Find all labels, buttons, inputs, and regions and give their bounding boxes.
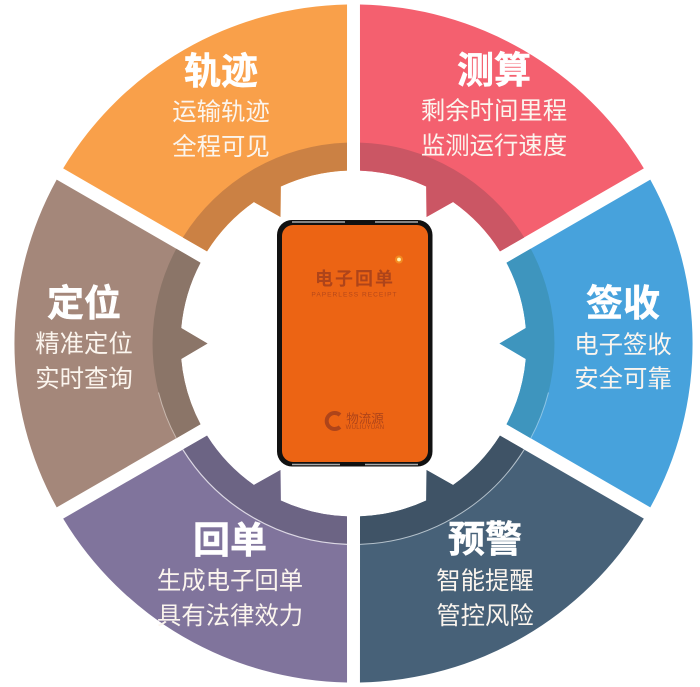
heading: 测算: 测算 <box>457 50 531 91</box>
text: 回单 description: 具有法律效力 <box>157 603 303 630</box>
heading: 轨迹: 轨迹 <box>184 51 258 92</box>
device subtitle: PAPERLESS RECEIPT <box>311 292 398 298</box>
logo: WULIUYUAN <box>346 425 384 431</box>
panel: 预警 segment <box>285 388 665 687</box>
text: 预警 description: 智能提醒 <box>436 568 534 595</box>
text: 回单 description <box>157 568 303 630</box>
text: 预警 description: 管控风险 <box>436 603 534 630</box>
text: 预警 description <box>436 568 534 630</box>
panel: 定位 segment <box>14 180 208 507</box>
text: 测算 description: 监测运行速度 <box>421 133 567 160</box>
panel: 测算 segment <box>285 0 665 299</box>
text: 定位 description: 精准定位 <box>35 331 133 358</box>
panel: 轨迹 segment <box>42 0 422 299</box>
device title: 电子回单 <box>315 269 395 289</box>
panel: 回单 segment <box>42 388 422 687</box>
text: 测算 description <box>421 98 567 160</box>
heading: 预警: 预警 <box>448 519 522 560</box>
logo <box>327 412 384 431</box>
text: 轨迹 description: 全程可见 <box>172 134 270 161</box>
icon: indicator light <box>395 256 403 264</box>
text: 测算 description: 剩余时间里程 <box>421 98 567 125</box>
text: 回单 description: 生成电子回单 <box>157 568 303 595</box>
device: paperless receipt card <box>277 220 432 466</box>
text: 签收 description: 电子签收 <box>574 332 672 359</box>
logo: 物流源 <box>346 412 384 426</box>
text: 轨迹 description <box>172 99 270 161</box>
heading: 定位: 定位 <box>47 283 121 324</box>
text: 签收 description: 安全可靠 <box>574 366 672 393</box>
heading: 回单: 回单 <box>193 520 267 561</box>
text: 签收 description <box>574 332 672 393</box>
text: 轨迹 description: 运输轨迹 <box>172 99 270 126</box>
text: 定位 description <box>35 331 133 393</box>
heading: 签收: 签收 <box>586 283 660 324</box>
text: 定位 description: 实时查询 <box>35 366 133 393</box>
panel: 签收 segment <box>500 180 693 507</box>
